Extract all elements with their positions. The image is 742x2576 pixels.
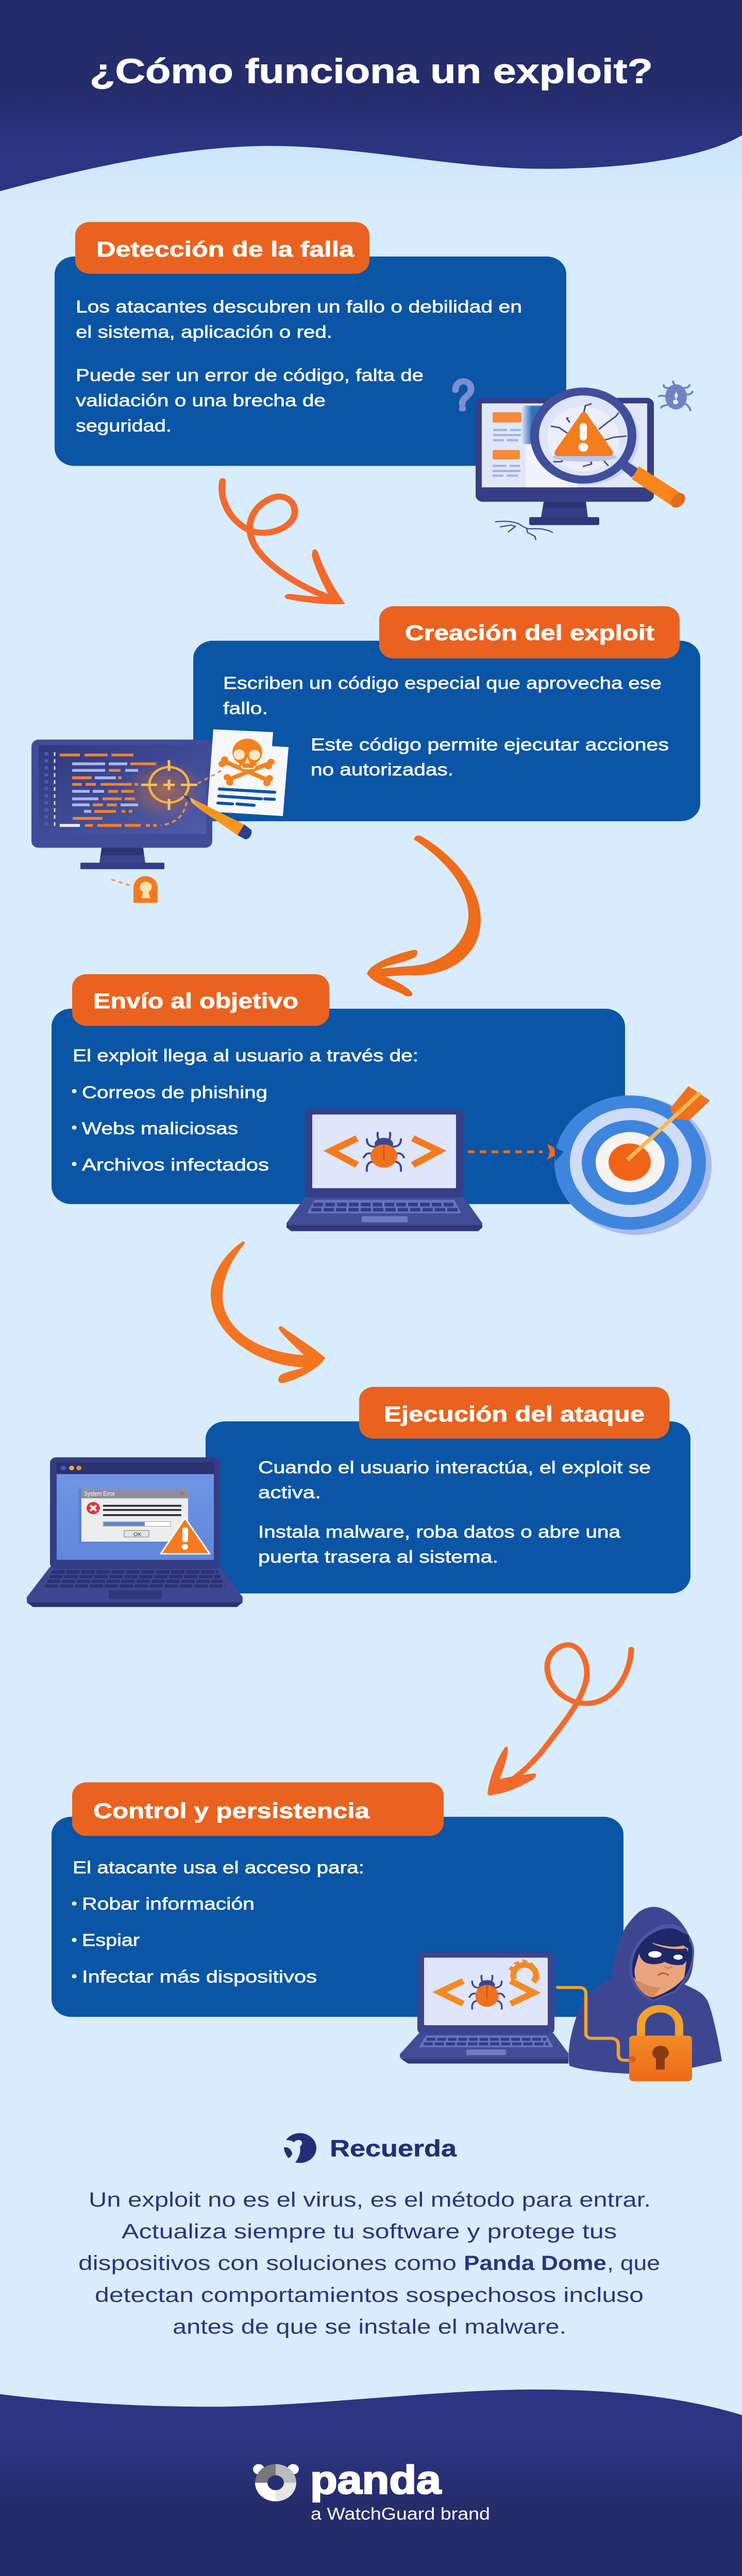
icon: bug <box>659 381 693 411</box>
text block: control <box>72 1858 364 1986</box>
icon: question mark <box>456 381 471 411</box>
logo: panda: a WatchGuard brand <box>311 2504 490 2523</box>
icon: panda <box>253 2464 299 2501</box>
heading: Envío al objetivo: Envío al objetivo <box>93 989 298 1013</box>
arrow: step 2 to 3 <box>367 836 481 996</box>
text block: creación <box>223 673 669 779</box>
bug <box>364 1133 404 1171</box>
text block: detección: Los atacantes descubren un fallo o debilidad en <box>76 297 522 316</box>
heading: Detección de la falla: Detección de la falla <box>96 238 355 261</box>
text block: detección: seguridad. <box>76 416 172 435</box>
text block: ejecución: activa. <box>258 1483 321 1502</box>
text block: envío: Webs maliciosas <box>82 1119 238 1138</box>
icon: keyhole lock <box>111 876 158 903</box>
bug <box>469 1976 504 2009</box>
text block: creación: Escriben un código especial que aprovecha ese <box>223 673 662 692</box>
heading: Detección de la falla <box>75 222 369 274</box>
illustration: laptop with system error <box>27 1458 243 1607</box>
text block: control: Infectar más dispositivos <box>82 1967 317 1986</box>
text block: detección: Puede ser un error de código, falta de <box>76 366 424 385</box>
heading: Recuerda <box>284 2133 457 2163</box>
text block: recuerda: Panda Dome <box>464 2251 606 2275</box>
arrow: step 1 to 2 <box>222 481 345 604</box>
logo: panda <box>253 2458 490 2523</box>
text block: envío: Archivos infectados <box>82 1155 269 1174</box>
heading: Control y persistencia: Control y persistencia <box>93 1799 370 1823</box>
heading: Envío al objetivo <box>72 974 329 1026</box>
illustration: hacker <box>568 1907 722 2074</box>
panel: Ejecución del ataque <box>206 1387 690 1594</box>
dialog: system error <box>78 1489 188 1543</box>
arrow: step 3 to 4 <box>211 1241 325 1383</box>
text block: envío: El exploit llega al usuario a través de: <box>73 1046 418 1065</box>
face <box>633 1931 689 1997</box>
illustration: target with arrow <box>554 1086 712 1235</box>
text block: creación: fallo. <box>223 699 268 718</box>
dialog: system error: System Error <box>84 1490 115 1498</box>
text block: recuerda: Actualiza siempre tu software y protege tus <box>122 2220 617 2243</box>
heading: Ejecución del ataque <box>359 1387 669 1438</box>
text block: envío: Correos de phishing <box>82 1083 267 1102</box>
gear <box>510 1961 538 1982</box>
panel: Creación del exploit <box>193 606 700 821</box>
text block: creación: Este código permite ejecutar acciones <box>311 735 669 754</box>
text block: recuerda: dispositivos con soluciones como <box>78 2251 457 2275</box>
text block: recuerda <box>78 2188 660 2338</box>
text block: recuerda: , que <box>607 2251 660 2275</box>
heading: Control y persistencia <box>72 1782 444 1836</box>
arrow: step 4 to 5 <box>487 1645 631 1795</box>
warning triangle <box>161 1518 210 1554</box>
document with skull <box>198 730 289 816</box>
header band <box>0 0 742 191</box>
illustration: monitor with magnifier <box>476 392 688 525</box>
text block: recuerda: detectan comportamientos sospechosos incluso <box>95 2283 644 2306</box>
icon: floor crack <box>495 521 553 540</box>
heading: Recuerda: Recuerda <box>330 2136 457 2162</box>
heading: Creación del exploit: Creación del exploit <box>405 621 654 645</box>
title: ¿Cómo funciona un exploit? <box>90 52 653 90</box>
text block: ejecución: puerta trasera al sistema. <box>258 1548 498 1567</box>
text block: detección <box>76 297 522 435</box>
heading: Ejecución del ataque: Ejecución del ataque <box>384 1402 645 1426</box>
panel: Detección de la falla <box>55 222 566 466</box>
text block: recuerda: Un exploit no es el virus, es el método para entrar. <box>89 2188 651 2211</box>
icon: panda mark <box>284 2133 316 2163</box>
text block: detección: validación o una brecha de <box>76 391 326 410</box>
text block: envío <box>72 1046 418 1174</box>
illustration: padlock with wire <box>558 1988 692 2081</box>
text block: creación: no autorizadas. <box>311 760 453 779</box>
text block: ejecución: Instala malware, roba datos o abre una <box>258 1522 620 1541</box>
logo: panda: panda <box>310 2458 442 2502</box>
text block: recuerda: antes de que se instale el malware. <box>173 2315 566 2338</box>
footer band <box>0 2389 742 2576</box>
panel: Envío al objetivo <box>52 974 625 1204</box>
pencil <box>181 794 251 839</box>
heading: Creación del exploit <box>379 606 680 658</box>
illustration: monitor with code and target <box>31 730 289 869</box>
text block: ejecución <box>258 1458 651 1567</box>
text block: ejecución: Cuando el usuario interactúa, el exploit se <box>258 1458 651 1477</box>
text block: detección: el sistema, aplicación o red. <box>76 323 332 342</box>
text block: control: Robar información <box>82 1894 255 1913</box>
dialog: system error: OK <box>133 1532 142 1537</box>
illustration: laptop with bug <box>286 1109 562 1231</box>
panel: Control y persistencia <box>52 1782 623 2017</box>
text block: control: Espiar <box>82 1931 140 1950</box>
text block: control: El atacante usa el acceso para: <box>73 1858 364 1877</box>
dashed arrow <box>468 1144 562 1160</box>
illustration: laptop with bug and gear <box>400 1952 568 2063</box>
